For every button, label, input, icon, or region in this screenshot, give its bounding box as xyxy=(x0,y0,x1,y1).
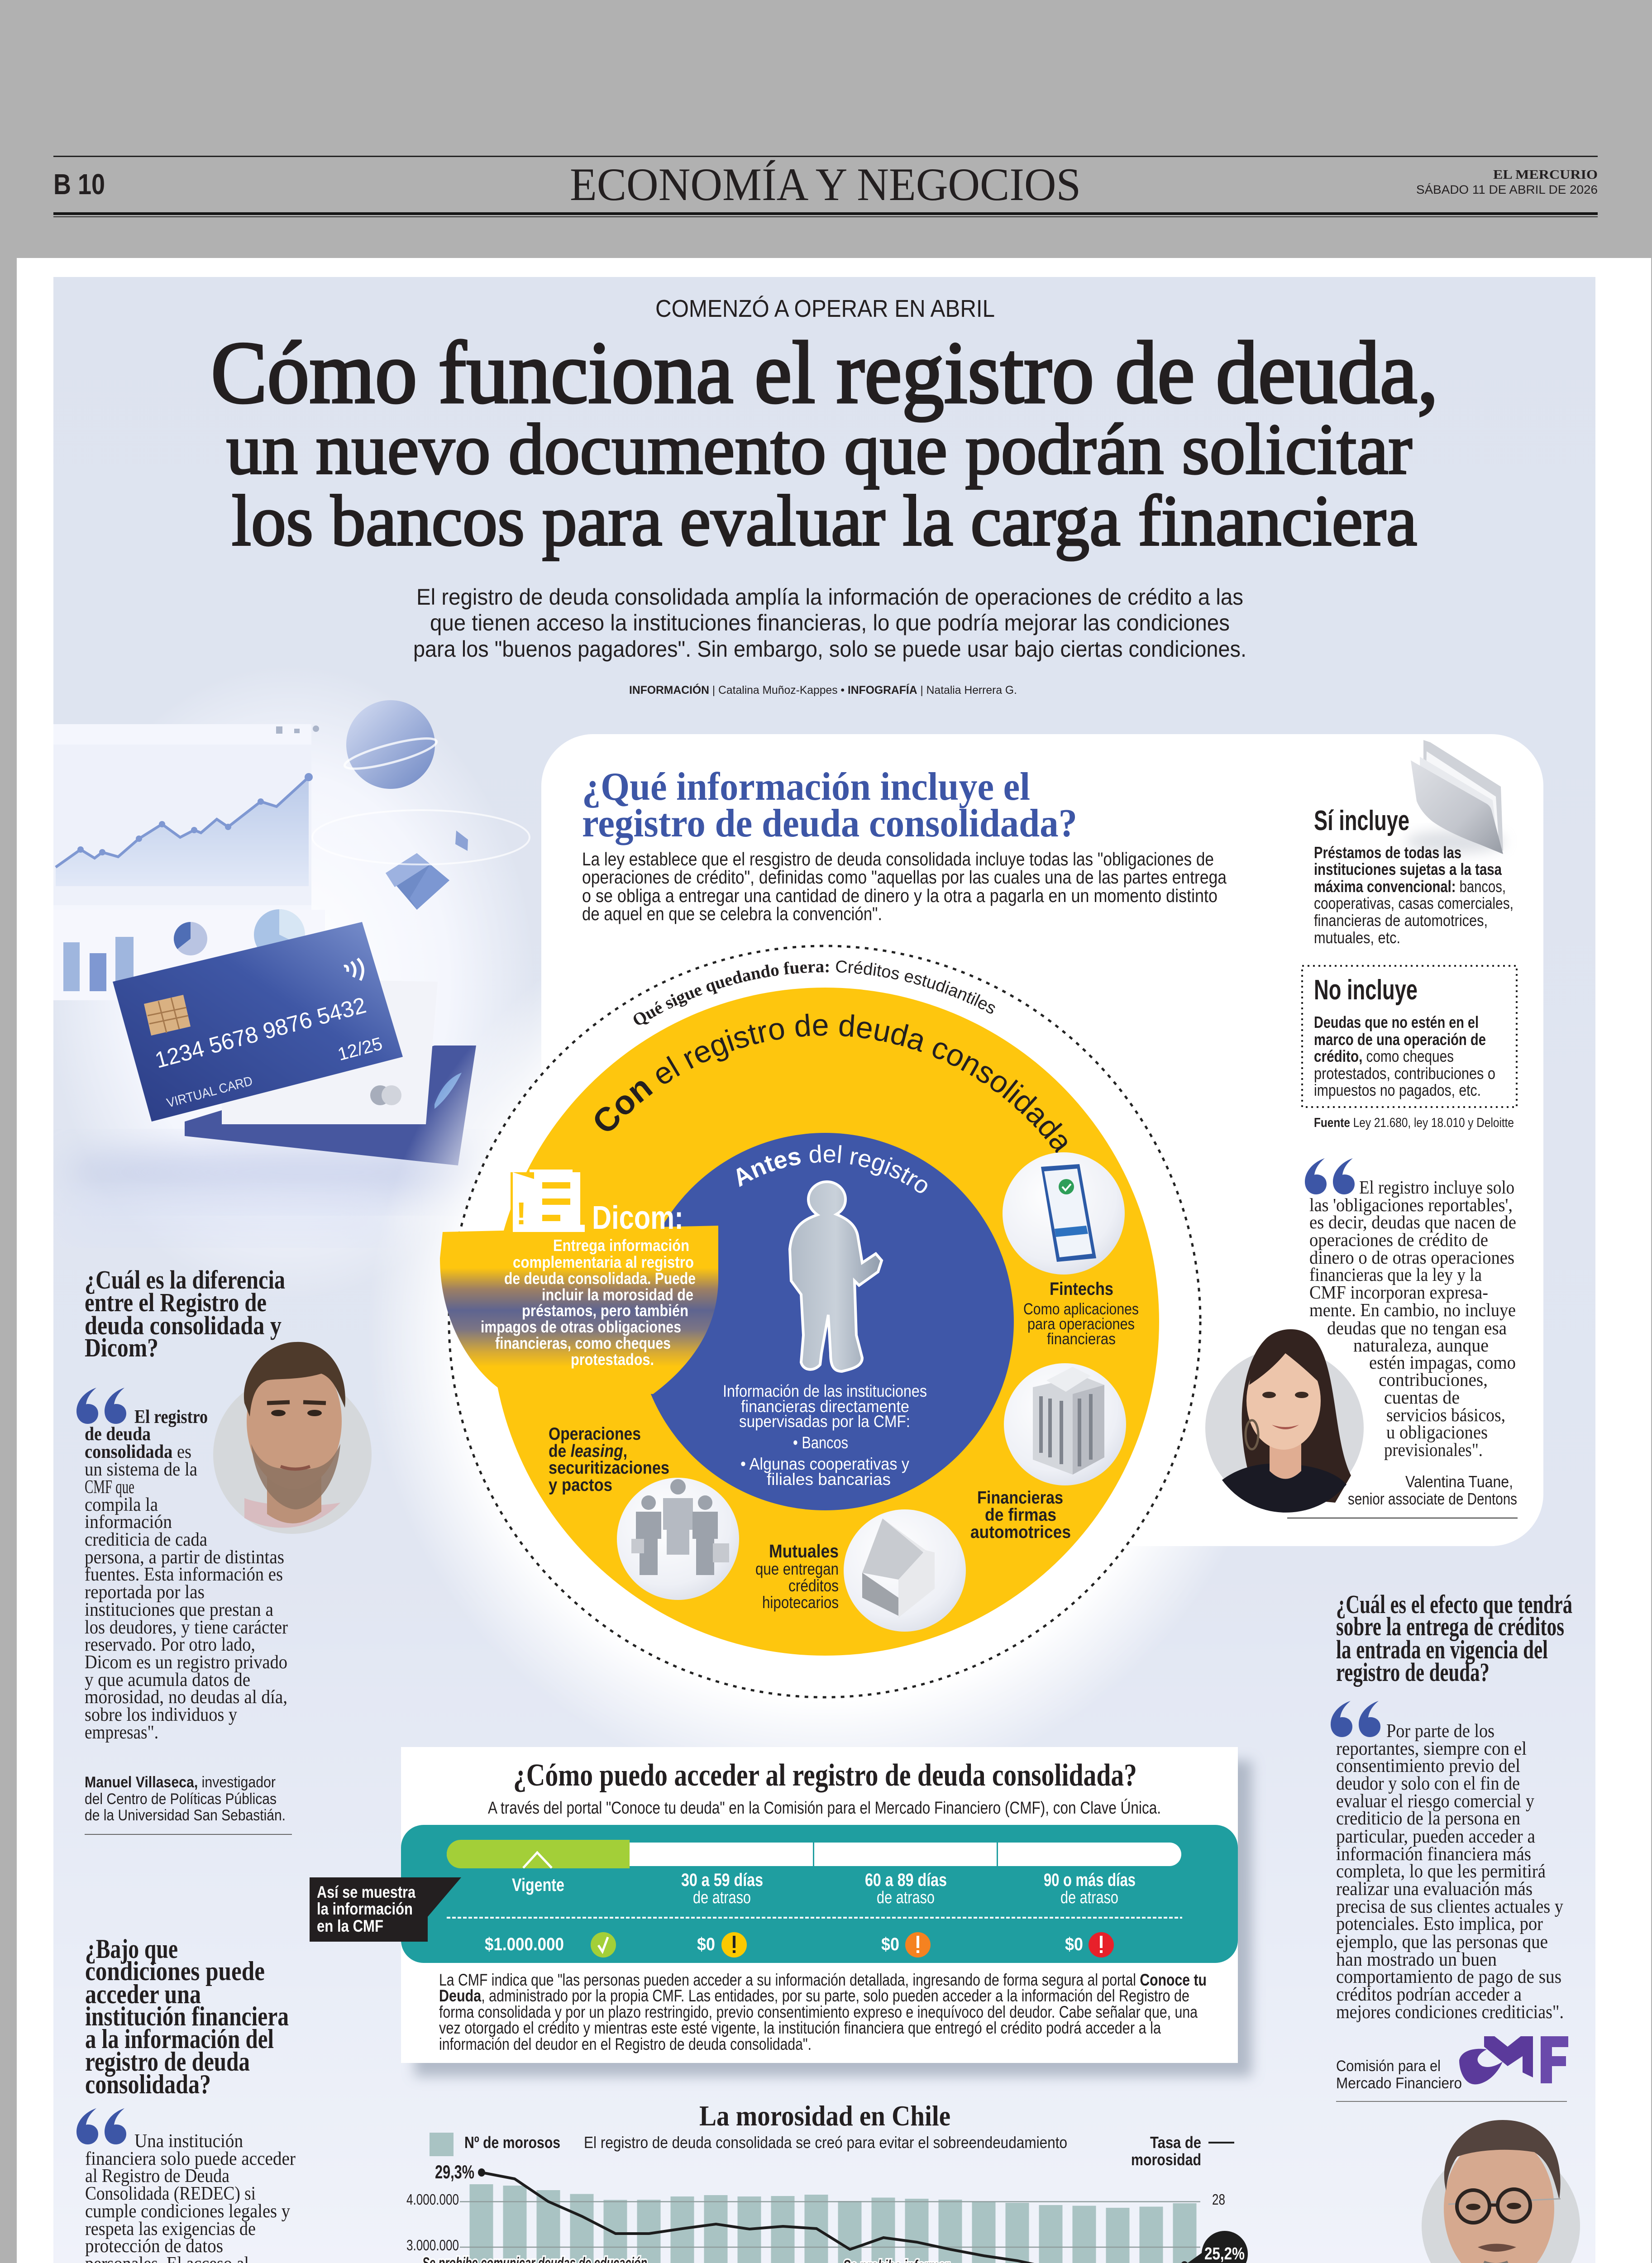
quote text xyxy=(85,1407,288,1743)
quote: Valentina Tuane: dinero o de otras operaciones xyxy=(1309,1247,1514,1268)
Fintechs item: Como aplicaciones xyxy=(1023,1300,1139,1318)
quote text: Una institución xyxy=(134,2131,243,2152)
quote text: deudor y solo con el fin de xyxy=(1336,1773,1520,1794)
quote text: un sistema de la xyxy=(85,1459,197,1480)
chart legend: El registro de deuda consolidada se creó para evitar el sobreendeudamiento xyxy=(584,2133,1067,2152)
quote text: Por parte de los xyxy=(1386,1721,1494,1742)
quote text: financiera solo puede acceder xyxy=(85,2148,296,2169)
Dicom tag: de deuda consolidada. Puede xyxy=(504,1269,696,1288)
portrait: Valentina Tuane xyxy=(1205,1329,1364,1513)
question heading: registro de deuda xyxy=(85,2047,250,2077)
newspaper header: SÁBADO 11 DE ABRIL DE 2026 xyxy=(1416,183,1598,196)
quote text: información financiera más xyxy=(1336,1844,1531,1865)
quote: Valentina Tuane: CMF incorporan expresa- xyxy=(1309,1282,1488,1303)
logo: CMF xyxy=(1459,2036,1568,2084)
quote text: persona, a partir de distintas xyxy=(85,1547,284,1568)
No incluye box: No incluye xyxy=(1314,974,1418,1006)
CMF status bar: $0 xyxy=(697,1934,715,1954)
Sí incluye: Sí incluye xyxy=(1314,805,1409,836)
subheading: A través del portal "Conoce tu deuda" en la Comisión para el Mercado Financiero (CMF), con Clave Única. xyxy=(488,1798,1161,1818)
No incluye box: marco de una operación de xyxy=(1314,1030,1486,1049)
Fintechs item xyxy=(1003,1152,1139,1348)
newspaper header xyxy=(53,156,1598,217)
source: Fuente Ley 21.680, ley 18.010 y Deloitte xyxy=(1314,1116,1514,1130)
curved label: antes del registro: Antes del registro xyxy=(728,1141,935,1200)
curved label: what stays out: Qué sigue quedando fuera: Créditos estudiantiles xyxy=(629,957,999,1031)
attribution: Manuel Villaseca: del Centro de Políticas Públicas xyxy=(85,1790,277,1808)
heading xyxy=(582,765,1077,845)
quote text: créditos podrían acceder a xyxy=(1336,1984,1522,2005)
intro text: o se obliga a entregar una cantidad de dinero y la otra a pagarla en un momento distinto xyxy=(582,885,1218,906)
quote text: cumple condiciones legales y xyxy=(85,2201,290,2222)
quote text: compila la xyxy=(85,1494,158,1515)
blue circle xyxy=(636,1133,1014,1510)
Dicom tag: préstamos, pero también xyxy=(522,1301,688,1320)
question heading: sobre la entrega de créditos xyxy=(1336,1612,1564,1641)
top title block: INFORMACIÓN | Catalina Muñoz-Kappes • INFOGRAFÍA | Natalia Herrera G. xyxy=(629,683,1017,697)
chart legend: morosidad xyxy=(1131,2150,1201,2169)
quote text: reservado. Por otro lado, xyxy=(85,1634,255,1655)
quote text: particular, pueden acceder a xyxy=(1336,1826,1535,1847)
Operaciones item: Operaciones xyxy=(549,1424,641,1444)
question heading: la entrada en vigencia del xyxy=(1336,1635,1548,1664)
quote: Valentina Tuane: estén impagas, como xyxy=(1369,1352,1516,1373)
Dicom tag: impagos de otras obligaciones xyxy=(481,1318,681,1336)
diagram: concentric circles xyxy=(440,946,1200,1697)
Dicom tag: Dicom: xyxy=(592,1200,683,1236)
illustration: credit cards and charts: VIRTUAL CARD xyxy=(165,1074,254,1111)
illustration: credit cards and charts: 12/25 xyxy=(336,1034,385,1065)
question heading: Dicom? xyxy=(85,1333,158,1362)
Fintechs item: para operaciones xyxy=(1027,1315,1135,1333)
icon: document alert xyxy=(511,1170,585,1232)
callout: así se muestra: en la CMF xyxy=(317,1917,383,1935)
quote: Valentina Tuane: financieras que la ley y la xyxy=(1309,1264,1482,1285)
chart legend xyxy=(430,2133,1234,2169)
quote: Valentina Tuane: operaciones de crédito de xyxy=(1309,1229,1488,1250)
Sí incluye: máxima convencional: bancos, xyxy=(1314,877,1506,896)
question heading: a la información del xyxy=(85,2024,274,2054)
Operaciones item xyxy=(549,1424,739,1600)
blue circle text: • Algunas cooperativas y xyxy=(740,1455,909,1473)
line: tasa de morosidad xyxy=(435,2161,1248,2263)
quote: Valentina Tuane xyxy=(1305,1158,1516,1460)
body text: información del deudor en el Registro de deuda consolidada". xyxy=(439,2035,812,2053)
Financieras item xyxy=(970,1363,1126,1542)
Sí incluye: mutuales, etc. xyxy=(1314,928,1400,947)
No incluye box: Deudas que no estén en el xyxy=(1314,1013,1479,1031)
No incluye box: crédito, como cheques xyxy=(1314,1047,1454,1065)
CMF status bar: de atraso xyxy=(693,1888,751,1907)
quote text: CMF que xyxy=(85,1477,134,1498)
top title block: Cómo funciona el registro de deuda, xyxy=(211,324,1438,422)
attribution: Manuel Villaseca xyxy=(85,1774,292,1835)
Financieras item: Financieras xyxy=(977,1488,1063,1508)
attribution: Manuel Villaseca: Manuel Villaseca, investigador xyxy=(85,1774,276,1791)
intro text: operaciones de crédito", definidas como "aquellas por las cuales una de las partes entrega xyxy=(582,867,1227,888)
attribution: CMF xyxy=(1336,2058,1567,2102)
CMF status bar: 30 a 59 días xyxy=(681,1870,763,1890)
quote text: reportantes, siempre con el xyxy=(1336,1738,1527,1759)
Sí incluye: Préstamos de todas las xyxy=(1314,843,1461,862)
top title block xyxy=(211,295,1438,697)
right question: efecto en créditos xyxy=(1331,1590,1588,2263)
quote: Valentina Tuane: mente. En cambio, no incluye xyxy=(1309,1299,1516,1320)
Mutuales item xyxy=(755,1509,966,1632)
quote: Valentina Tuane: servicios básicos, xyxy=(1386,1404,1505,1425)
panel: cómo acceder xyxy=(310,1747,1252,2077)
quote text: precisa de sus clientes actuales y xyxy=(1336,1896,1563,1917)
newspaper header: EL MERCURIO xyxy=(1493,167,1598,182)
intro text: La ley establece que el resgistro de deuda consolidada incluye todas las "obligaciones de xyxy=(582,849,1214,869)
quote mark xyxy=(76,2108,126,2144)
quote text: información xyxy=(85,1512,172,1533)
attribution: Manuel Villaseca: de la Universidad San Sebastián. xyxy=(85,1807,286,1824)
quote: Valentina Tuane: deudas que no tengan esa xyxy=(1327,1318,1507,1338)
quote text: El registro xyxy=(134,1407,208,1428)
Mutuales item: que entregan xyxy=(755,1560,839,1578)
Sí incluye xyxy=(1314,805,1514,947)
quote: Valentina Tuane: previsionales". xyxy=(1384,1439,1483,1460)
Dicom tag: complementaria al registro xyxy=(513,1253,694,1271)
Dicom tag: Entrega información xyxy=(553,1236,689,1255)
quote text: al Registro de Deuda xyxy=(85,2166,229,2187)
blue circle text: supervisadas por la CMF: xyxy=(739,1412,910,1431)
chart legend: Nº de morosos xyxy=(464,2133,560,2152)
illustration: credit cards and charts xyxy=(53,700,530,1255)
quote text xyxy=(85,2131,296,2263)
attribution: CMF: Mercado Financiero xyxy=(1336,2075,1462,2092)
intro text xyxy=(582,849,1227,924)
quote text: de deuda xyxy=(85,1424,151,1445)
question heading: deuda consolidada y xyxy=(85,1311,282,1340)
No incluye box: protestados, contribuciones o xyxy=(1314,1064,1495,1083)
quote text: instituciones que prestan a xyxy=(85,1599,273,1620)
quote text: sobre los individuos y xyxy=(85,1704,237,1725)
Dicom tag: financieras, como cheques xyxy=(495,1334,671,1352)
curved label: con el registro: Con el registro de deuda consolidada xyxy=(585,1008,1079,1159)
quote: Valentina Tuane: cuentas de xyxy=(1384,1387,1460,1408)
quote text: consolidada es xyxy=(85,1442,191,1462)
callout: así se muestra: la información xyxy=(317,1900,413,1918)
blue circle text: • Bancos xyxy=(793,1433,848,1452)
top title block: El registro de deuda consolidada amplía la información de operaciones de crédito a las xyxy=(416,584,1243,610)
attribution: CMF: Comisión para el xyxy=(1336,2058,1441,2075)
yellow circle xyxy=(491,988,1159,1656)
Financieras item: de firmas xyxy=(985,1505,1056,1525)
illustration: credit cards and charts: 1234 5678 9876 5432 xyxy=(153,992,369,1073)
quote text: morosidad, no deudas al día, xyxy=(85,1687,287,1708)
question heading: entre el Registro de xyxy=(85,1288,267,1317)
blue circle text: financieras directamente xyxy=(741,1397,909,1416)
top title block: COMENZÓ A OPERAR EN ABRIL xyxy=(655,295,995,322)
quote: Valentina Tuane: las 'obligaciones reportables', xyxy=(1309,1194,1513,1215)
heading: ¿Qué información incluye el xyxy=(582,765,1030,809)
CMF status bar: de atraso xyxy=(1060,1888,1118,1907)
top title block: que tienen acceso la instituciones financieras, lo que podría mejorar las condiciones xyxy=(430,610,1230,635)
quote text: los deudores, y tiene carácter xyxy=(85,1617,288,1638)
heading: ¿Cómo puedo acceder al registro de deuda consolidada? xyxy=(513,1758,1137,1793)
left question: diferencia con Dicom xyxy=(76,1265,372,1835)
question heading: consolidada? xyxy=(85,2069,211,2099)
quote: Valentina Tuane: u obligaciones xyxy=(1386,1422,1488,1442)
Dicom tag xyxy=(440,1170,718,1394)
attribution: Valentina Tuane xyxy=(1287,1472,1518,1518)
Sí incluye: financieras de automotrices, xyxy=(1314,911,1488,930)
body text: La CMF indica que "las personas pueden acceder a su información detallada, ingresando de forma segura al portal Conoce tu xyxy=(439,1971,1207,1989)
quote text: consentimiento previo del xyxy=(1336,1756,1520,1776)
attribution: Valentina Tuane: senior associate de Dentons xyxy=(1348,1490,1517,1508)
quote text: evaluar el riesgo comercial y xyxy=(1336,1791,1534,1812)
quote text: protección de datos xyxy=(85,2236,223,2257)
callout: así se muestra: Así se muestra xyxy=(317,1883,415,1901)
quote text: comportamiento de pago de sus xyxy=(1336,1967,1561,1987)
body text: Deuda, administrado por la propia CMF. Las entidades, por su parte, solo pueden acceder a la información del Registro de xyxy=(439,1986,1189,2005)
Financieras item: automotrices xyxy=(970,1523,1071,1542)
person figure xyxy=(790,1182,882,1371)
chart: La morosidad en Chile xyxy=(406,2100,1248,2263)
question heading xyxy=(85,1265,285,1362)
Operaciones item: y pactos xyxy=(549,1475,612,1495)
Sí incluye: instituciones sujetas a la tasa xyxy=(1314,860,1502,878)
CMF status bar: $0 xyxy=(1065,1934,1083,1954)
quote text: ejemplo, que las personas que xyxy=(1336,1932,1548,1953)
quote text: mejores condiciones crediticias". xyxy=(1336,2002,1564,2023)
CMF status bar: $1.000.000 xyxy=(485,1934,564,1954)
Sí incluye: cooperativas, casas comerciales, xyxy=(1314,894,1514,912)
CMF status bar: 60 a 89 días xyxy=(865,1870,947,1890)
Operaciones item: de leasing, xyxy=(549,1442,627,1461)
quote: Valentina Tuane: naturaleza, aunque xyxy=(1353,1335,1489,1356)
status icons xyxy=(591,1932,1114,1957)
blue circle text: filiales bancarias xyxy=(767,1470,891,1489)
quote: Valentina Tuane: contribuciones, xyxy=(1379,1369,1488,1390)
annotations xyxy=(422,2254,1072,2263)
CMF status bar: de atraso xyxy=(877,1888,935,1907)
question heading: ¿Cuál es la diferencia xyxy=(85,1265,285,1294)
quote text: empresas". xyxy=(85,1722,158,1743)
quote text: realizar una evaluación más xyxy=(1336,1879,1533,1900)
question heading: condiciones puede xyxy=(85,1956,265,1986)
blue circle text: Información de las instituciones xyxy=(723,1382,927,1400)
quote: Valentina Tuane: es decir, deudas que nacen de xyxy=(1309,1212,1516,1232)
heading: registro de deuda consolidada? xyxy=(582,802,1077,845)
question heading xyxy=(85,1934,289,2099)
blue circle text xyxy=(723,1382,927,1489)
intro text: de aquel en que se celebra la convención". xyxy=(582,903,882,924)
CMF status bar: Vigente xyxy=(512,1875,564,1895)
attribution: Valentina Tuane: Valentina Tuane, xyxy=(1405,1472,1513,1491)
callout: así se muestra xyxy=(310,1877,461,1942)
quote mark xyxy=(1331,1701,1380,1737)
quote text: Consolidada (REDEC) si xyxy=(85,2183,256,2204)
quote text: crediticio de la persona en xyxy=(1336,1808,1520,1829)
quote text xyxy=(1336,1721,1564,2023)
bars xyxy=(470,2184,1197,2263)
question heading xyxy=(1336,1590,1572,1687)
Dicom tag: protestados. xyxy=(571,1350,654,1369)
gridlines and axis labels xyxy=(406,2191,1225,2263)
CMF status bar: 90 o más días xyxy=(1044,1870,1136,1890)
question heading: registro de deuda? xyxy=(1336,1657,1490,1687)
icon: folder xyxy=(1405,740,1505,854)
quote text: fuentes. Esta información es xyxy=(85,1564,283,1585)
Mutuales item: créditos xyxy=(788,1576,839,1595)
quote: Valentina Tuane: El registro incluye solo xyxy=(1359,1177,1514,1198)
Dicom tag: incluir la morosidad de xyxy=(542,1285,693,1304)
chart legend: Tasa de xyxy=(1150,2133,1201,2152)
gridlines and axis labels: 4.000.000 xyxy=(406,2191,459,2208)
quote text: y que acumula datos de xyxy=(85,1670,250,1690)
Fintechs item: financieras xyxy=(1047,1330,1116,1348)
gridlines and axis labels: 28 xyxy=(1212,2191,1225,2208)
quote text: reportada por las xyxy=(85,1582,205,1603)
Operaciones item: securitizaciones xyxy=(549,1458,669,1478)
icon: document alert: ! xyxy=(516,1196,526,1231)
No incluye box: impuestos no pagados, etc. xyxy=(1314,1081,1481,1099)
CMF status bar xyxy=(401,1825,1238,1963)
body text: forma consolidada y por un plazo restringido, previo consentimiento expreso e inequívoco del deudor. Cabe señalar que, una xyxy=(439,2003,1198,2021)
question heading: acceder una xyxy=(85,1979,201,2009)
question heading: ¿Cuál es el efecto que tendrá xyxy=(1336,1590,1572,1619)
Mutuales item: Mutuales xyxy=(769,1541,839,1561)
quote text: completa, lo que les permitirá xyxy=(1336,1861,1546,1882)
question heading: ¿Bajo que xyxy=(85,1934,178,1964)
white circular halo behind diagram xyxy=(368,878,1282,1792)
Fintechs item: Fintechs xyxy=(1050,1279,1113,1299)
body text xyxy=(439,1971,1207,2053)
quote text: potenciales. Esto implica, por xyxy=(1336,1914,1543,1934)
chart title: La morosidad en Chile xyxy=(699,2100,950,2132)
top title block: un nuevo documento que podrán solicitar xyxy=(226,409,1412,489)
top title block: los bancos para evaluar la carga financiera xyxy=(232,480,1417,561)
quote mark xyxy=(76,1388,126,1424)
body text: vez otorgado el crédito y mientras este esté vigente, la institución financiera que entregó el crédito podrá acceder a la xyxy=(439,2019,1161,2037)
quote text: Dicom es un registro privado xyxy=(85,1652,287,1673)
No incluye box xyxy=(1302,966,1517,1107)
quote text: han mostrado un buen xyxy=(1336,1949,1497,1970)
panel: Qué información incluye xyxy=(541,734,1543,1546)
line: tasa de morosidad: 25,2% xyxy=(1204,2244,1245,2263)
portrait: Jorge Cayazzo xyxy=(1422,2120,1580,2263)
newspaper header: ECONOMÍA Y NEGOCIOS xyxy=(570,159,1081,210)
portrait: Manuel Villaseca xyxy=(213,1342,372,1534)
newspaper header: B 10 xyxy=(53,168,105,201)
gridlines and axis labels: 3.000.000 xyxy=(406,2237,459,2253)
question heading: institución financiera xyxy=(85,2001,289,2031)
quote text: crediticia de cada xyxy=(85,1529,207,1550)
left question: condiciones de acceso xyxy=(76,1934,372,2263)
top title block: para los "buenos pagadores". Sin embargo, solo se puede usar bajo ciertas condiciones. xyxy=(413,636,1246,662)
Mutuales item: hipotecarios xyxy=(762,1593,839,1612)
CMF status bar: $0 xyxy=(881,1934,899,1954)
line: tasa de morosidad: 29,3% xyxy=(435,2161,474,2182)
quote text: respeta las exigencias de xyxy=(85,2219,256,2239)
